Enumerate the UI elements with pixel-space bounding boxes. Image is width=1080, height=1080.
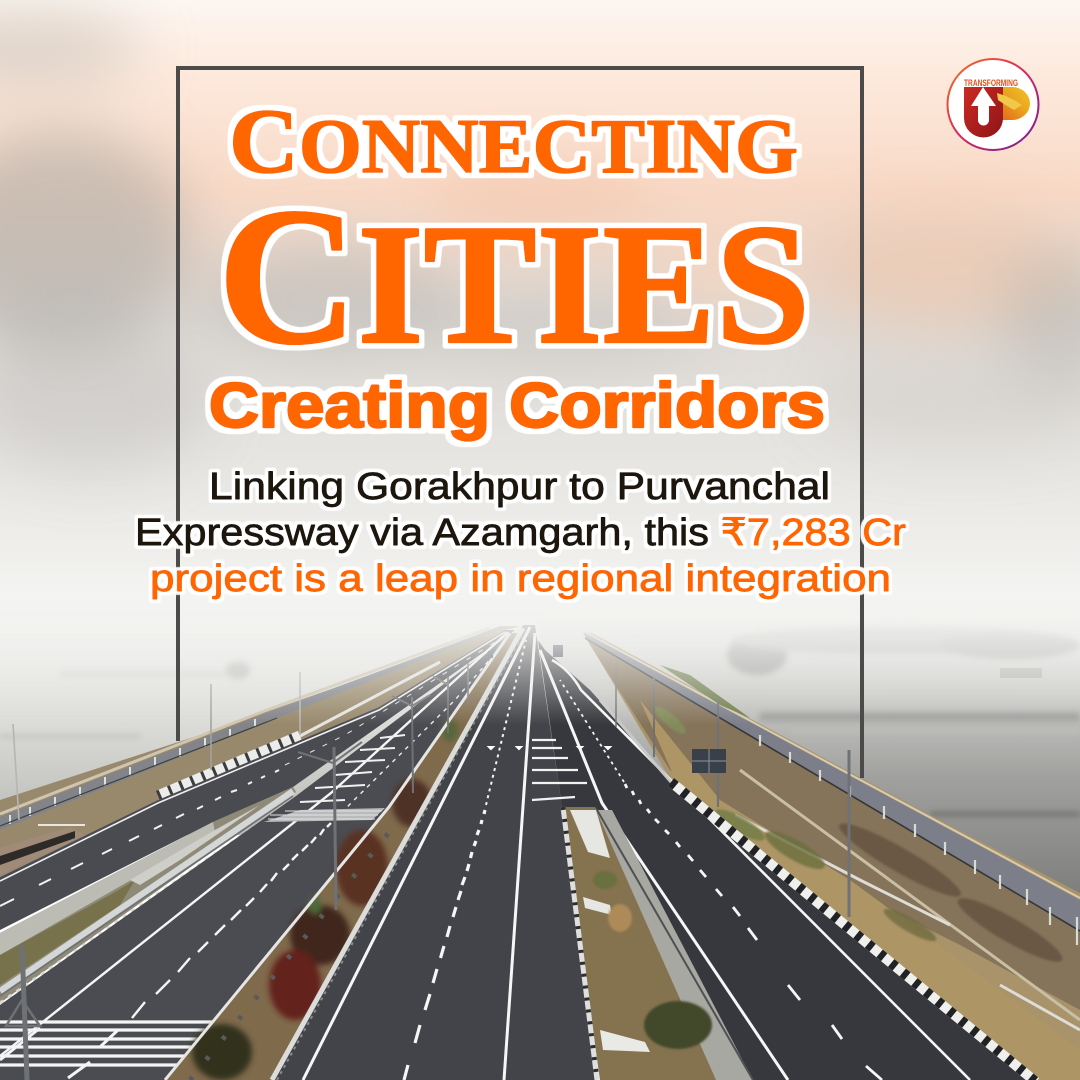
title: Connecting Cities Creating Corridors (209, 90, 825, 441)
photo: street light poles (6, 663, 849, 1080)
logo state map (997, 93, 1022, 110)
heading: Cities: CITIES (218, 168, 810, 385)
photo: median wall and guard rail on the left (0, 787, 296, 1003)
logo arrow (971, 87, 996, 126)
body text: project description (135, 466, 906, 600)
text line 1: Linking Gorakhpur to Purvanchal (209, 466, 830, 508)
photo: narrow median on the right (561, 807, 753, 1080)
photo: upper left carriageway (0, 630, 515, 930)
photo: hatched road markings at bottom left (0, 1022, 213, 1078)
logo wordmark: TRANSFORMING (964, 78, 1018, 89)
photo: lower left carriageway (0, 630, 515, 1080)
photo: fields on both sides of the expressway (0, 605, 1080, 895)
logo: Transforming UP (948, 59, 1038, 150)
background: hazy sky with clouds (0, 0, 1080, 640)
rectangular frame behind the text (178, 68, 862, 778)
text line 3: project is a leap in regional integration (150, 558, 891, 600)
heading: Creating Corridors: Creating Corridors (209, 371, 825, 441)
text line 2: Expressway via Azamgarh, this ₹7,283 Cr (135, 512, 906, 554)
photo: right embankment, verge and service road (583, 632, 1080, 1080)
photo: overhead road sign (488, 645, 726, 773)
photo: central planted median with flowering shrubs (165, 633, 523, 1080)
logo P shape (996, 87, 1030, 120)
horizon fog over the road (0, 560, 1080, 725)
photo: central carriageway (272, 625, 595, 1080)
heading: Connecting: CONNECTING (229, 90, 798, 192)
photo: striped roadside barrier on the left (158, 662, 440, 796)
photo: striped black and white barrier on the right (600, 700, 1036, 1080)
logo U shape (964, 87, 1003, 138)
photo: left embankment and service road (0, 626, 520, 877)
photo: right carriageway (532, 640, 1036, 1080)
